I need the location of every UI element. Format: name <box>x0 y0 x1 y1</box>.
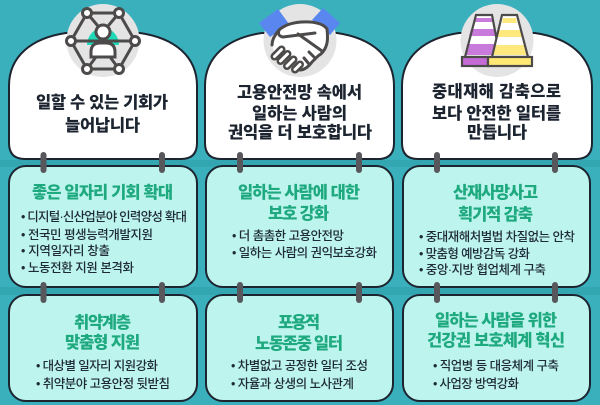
panel: health rights: 일하는 사람을 위한 <box>435 311 557 330</box>
header card: employment safety net <box>205 4 394 159</box>
bullet list: • 중대재해처벌법 차질없는 안착 <box>419 229 575 244</box>
header text: 권익을 더 보호합니다 <box>228 123 372 142</box>
icon: handshake <box>259 8 340 70</box>
panel: accident reduction: 산재사망사고 <box>453 183 538 202</box>
header text <box>228 83 372 142</box>
header text <box>36 93 168 135</box>
panel: accident reduction <box>403 166 590 287</box>
panel: health rights <box>403 295 590 401</box>
header text: 만듭니다 <box>467 123 527 142</box>
bullet list <box>36 359 170 391</box>
header text: 늘어납니다 <box>65 116 140 135</box>
header text: 고용안전망 속에서 <box>237 83 362 102</box>
bullet list: • 더 촘촘한 고용안전망 <box>232 229 344 243</box>
bullet list: • 중앙·지방 협업체계 구축 <box>419 262 546 277</box>
bullet list: • 차별없고 공정한 일터 조성 <box>231 359 368 373</box>
bullet list: • 디지털·신산업분야 인력양성 확대 <box>21 210 187 224</box>
pegs <box>40 152 165 303</box>
bullet list: • 대상별 일자리 지원강화 <box>36 359 158 373</box>
bullet list <box>232 229 377 260</box>
bullet list: • 사업장 방역강화 <box>433 377 519 391</box>
panel: accident reduction: 획기적 감축 <box>458 205 533 224</box>
pegs <box>237 152 362 303</box>
bullet list <box>433 359 559 391</box>
icon: person network <box>66 8 140 74</box>
panel: good jobs <box>9 166 197 287</box>
bullet list: • 일하는 사람의 권익보호강화 <box>232 246 377 260</box>
panel: worker protection: 일하는 사람에 대한 <box>238 183 360 202</box>
bullet list <box>419 229 575 277</box>
header text: 일할 수 있는 기회가 <box>36 93 168 112</box>
header card: industrial accidents <box>402 4 592 159</box>
fingers <box>274 50 300 70</box>
panel: inclusive workplace: 포용적 <box>278 313 320 332</box>
bullet list <box>21 210 187 275</box>
panel: employment safety net column <box>205 4 394 401</box>
bullet list: • 맞춤형 예방감독 강화 <box>419 246 530 261</box>
header text: 일하는 사람의 <box>252 104 347 123</box>
icon: safety cones <box>462 15 532 66</box>
panel: inclusive workplace: 노동존중 일터 <box>255 334 343 353</box>
panel: worker protection <box>206 166 393 287</box>
header text <box>432 82 561 142</box>
panel: inclusive workplace <box>206 295 393 401</box>
bullet list <box>231 359 368 391</box>
panel: worker protection: 보호 강화 <box>268 204 329 223</box>
bullet list: • 노동전환 지원 본격화 <box>21 261 134 275</box>
header text: 중대재해 감축으로 <box>432 82 561 101</box>
panel: industrial accident column <box>402 4 592 401</box>
panel: tailored support: 맞춤형 지원 <box>65 333 140 352</box>
bullet list: • 직업병 등 대응체계 구축 <box>433 359 559 373</box>
panel: health rights: 건강권 보호체계 혁신 <box>427 331 565 350</box>
header card: job opportunities <box>9 4 197 159</box>
bullet list: • 취약분야 고용안정 뒷받침 <box>36 377 170 391</box>
panel: tailored support <box>9 295 197 401</box>
panel: job opportunities column <box>9 4 197 401</box>
header text: 보다 안전한 일터를 <box>432 104 561 123</box>
bullet list: • 전국민 평생능력개발지원 <box>21 228 153 242</box>
bullet list: • 자율과 상생의 노사관계 <box>231 377 354 391</box>
pegs <box>434 152 558 303</box>
bullet list: • 지역일자리 창출 <box>21 244 110 258</box>
panel: tailored support: 취약계층 <box>74 313 131 332</box>
panel: good jobs: 좋은 일자리 기회 확대 <box>32 183 173 202</box>
